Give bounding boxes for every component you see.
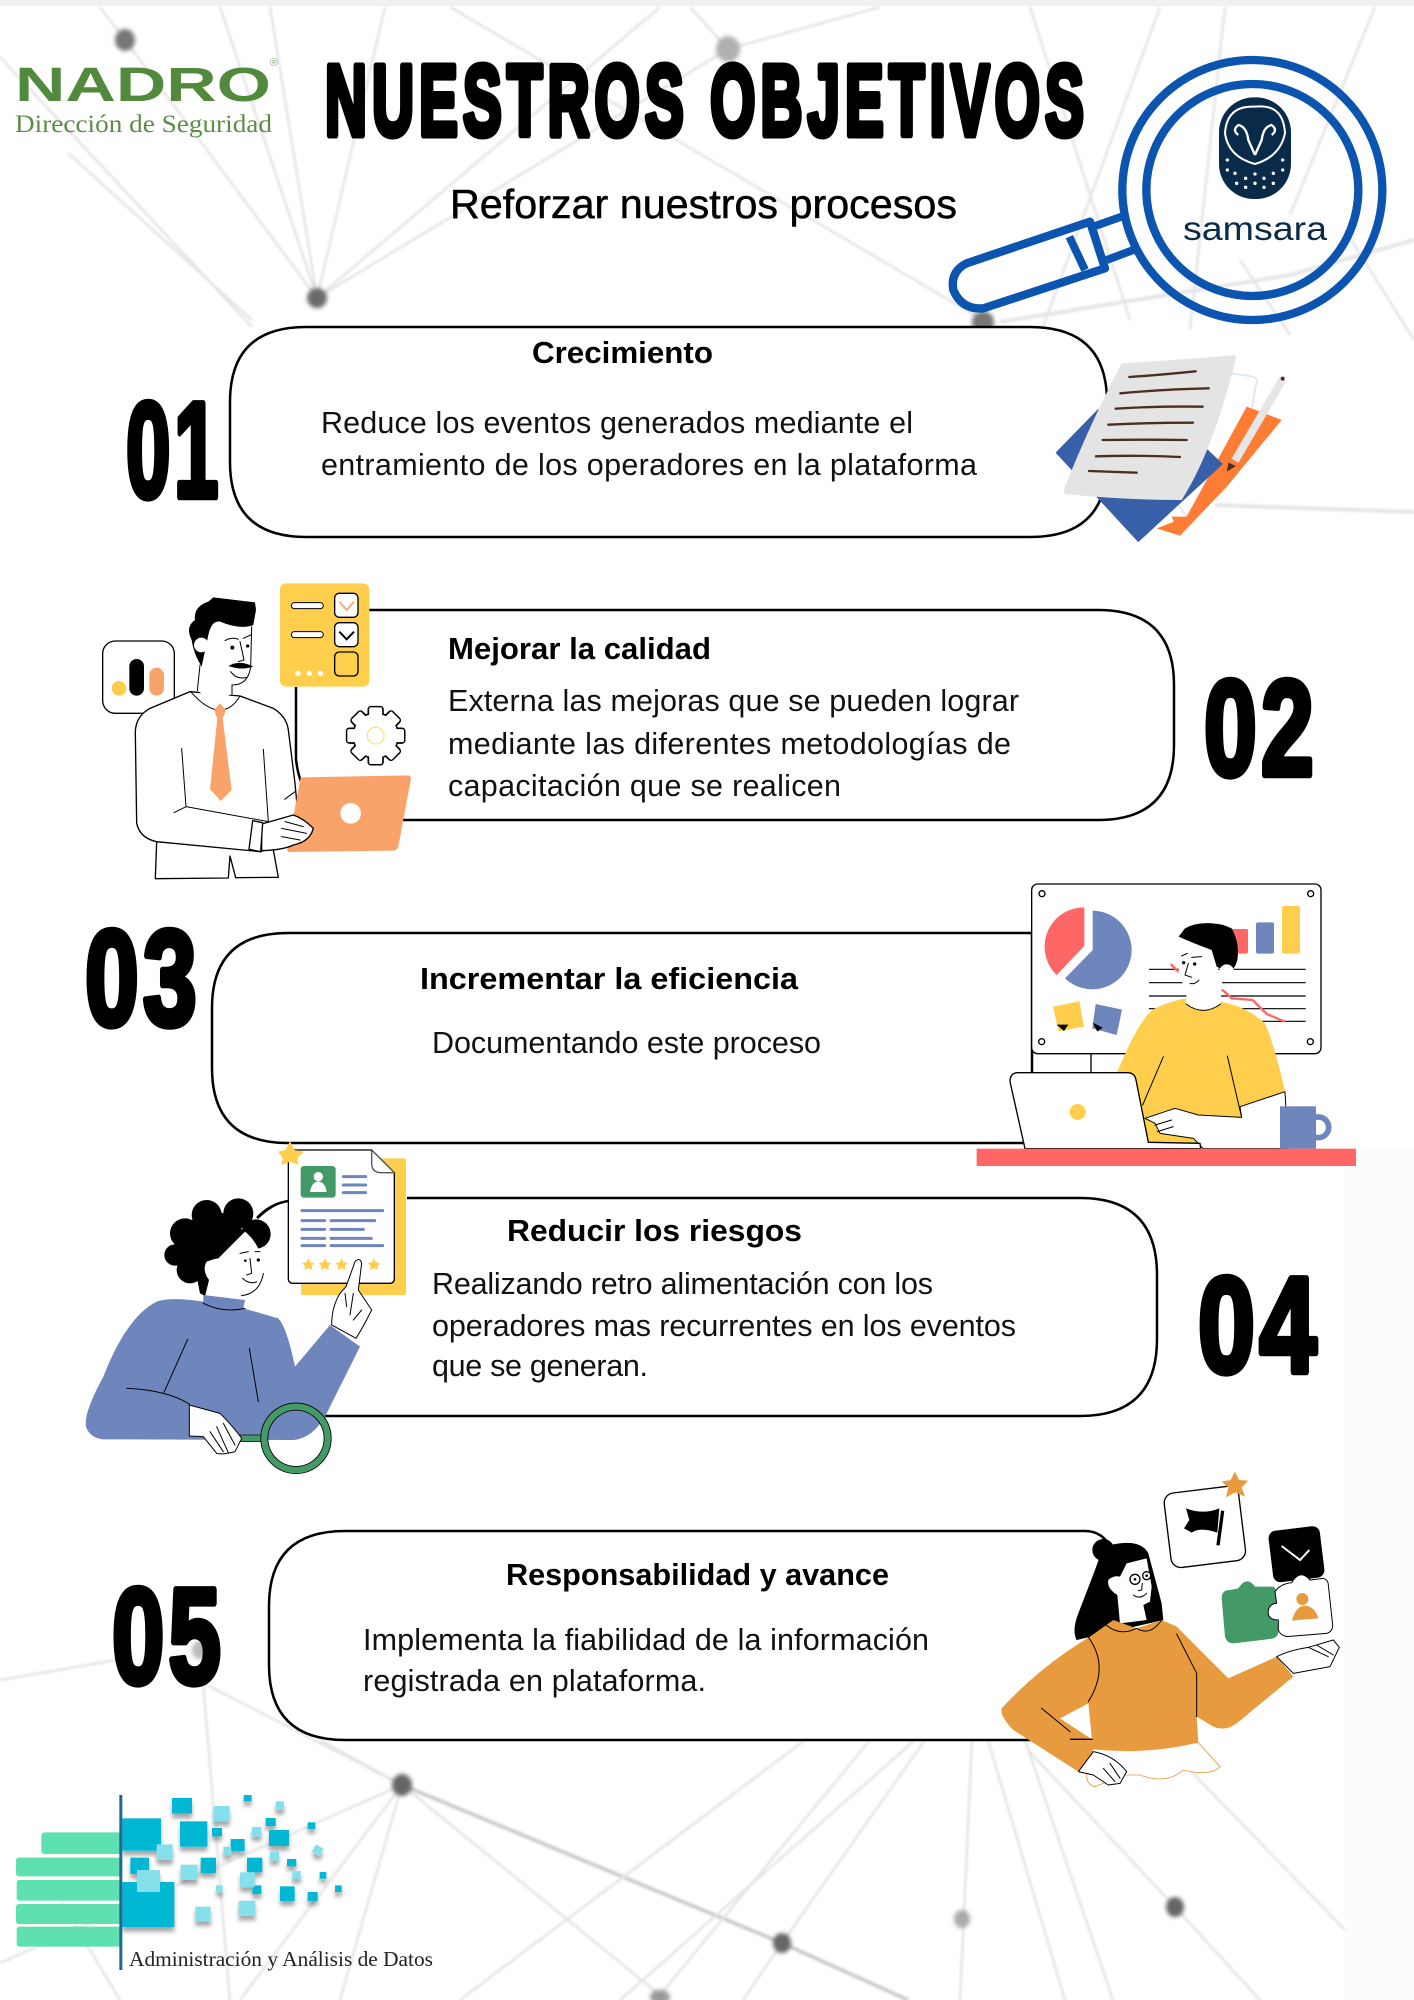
logo caption: Administración y Análisis de Datos bbox=[129, 1947, 433, 1971]
body text: capacitación que se realicen bbox=[448, 769, 841, 803]
panel: objective 4 bbox=[257, 1198, 1157, 1416]
icon: CV document bbox=[278, 1141, 406, 1295]
panel: objective 3 bbox=[212, 933, 1032, 1143]
body text: operadores mas recurrentes en los eventos bbox=[432, 1309, 1016, 1343]
subtitle: Reforzar nuestros procesos bbox=[450, 181, 957, 227]
woman figure bbox=[86, 1198, 372, 1440]
laptop bbox=[287, 775, 411, 852]
logo: Administración y Análisis de Datos bbox=[16, 1795, 342, 1970]
panel: objective 5 bbox=[269, 1531, 1120, 1740]
bar chart bbox=[1230, 906, 1300, 954]
heading: Responsabilidad y avance: Responsabilidad y avance bbox=[506, 1557, 889, 1592]
body text: entramiento de los operadores en la plataforma bbox=[321, 448, 977, 482]
icon: magnifier with samsara logo: samsara bbox=[1183, 210, 1328, 247]
body text bbox=[363, 1623, 929, 1698]
icon: magnifier bbox=[189, 1405, 328, 1470]
heading: Reducir los riesgos: Reducir los riesgos bbox=[507, 1213, 802, 1248]
logo: NADRO Dirección de Seguridad: Dirección de Seguridad bbox=[15, 111, 273, 138]
hand bbox=[249, 815, 313, 852]
body text: Reduce los eventos generados mediante el bbox=[321, 406, 913, 440]
logo: NADRO Dirección de Seguridad: ® bbox=[270, 57, 278, 69]
body text: Implementa la fiabilidad de la información bbox=[363, 1623, 929, 1657]
body text: mediante las diferentes metodologías de bbox=[448, 727, 1011, 761]
woman figure bbox=[1001, 1539, 1339, 1787]
body text: Externa las mejoras que se pueden lograr bbox=[448, 684, 1019, 718]
icon: checklist panel bbox=[280, 583, 369, 687]
illustration: man at desk with dashboard bbox=[977, 884, 1356, 1166]
body text bbox=[432, 1267, 1016, 1383]
icon: check tile bbox=[1268, 1525, 1325, 1583]
logo: NADRO Dirección de Seguridad bbox=[15, 57, 278, 138]
icon: documents and pen bbox=[1057, 355, 1285, 541]
icon: puzzle pieces bbox=[1222, 1575, 1333, 1643]
illustration: man with laptop and checklist bbox=[103, 583, 411, 879]
dashboard board bbox=[1032, 884, 1321, 1073]
number 05: 05 bbox=[112, 1560, 225, 1712]
mug bbox=[1280, 1106, 1329, 1149]
number 02: 02 bbox=[1204, 652, 1318, 804]
pie chart bbox=[1045, 907, 1132, 989]
icon: magnifier with samsara logo bbox=[953, 60, 1382, 320]
panel: objective 1 bbox=[230, 327, 1107, 537]
icon: bar chart tile bbox=[103, 641, 174, 713]
sticky notes bbox=[1053, 1001, 1122, 1035]
logo: NADRO Dirección de Seguridad: NADRO bbox=[15, 59, 271, 112]
icon: gear bbox=[347, 707, 405, 765]
laptop bbox=[1010, 1073, 1201, 1149]
heading: Mejorar la calidad: Mejorar la calidad bbox=[448, 631, 711, 666]
body text: que se generan. bbox=[432, 1349, 648, 1383]
number 01: 01 bbox=[126, 374, 222, 526]
body text bbox=[321, 406, 977, 482]
data squares bbox=[122, 1795, 342, 1927]
desk bbox=[977, 1149, 1356, 1166]
body text bbox=[448, 684, 1019, 803]
body text: registrada en plataforma. bbox=[363, 1664, 706, 1698]
body text: Documentando este proceso bbox=[432, 1026, 821, 1060]
heading: Crecimiento: Crecimiento bbox=[532, 335, 713, 370]
panel: objective 2 bbox=[296, 610, 1174, 820]
illustration: woman with floating icons bbox=[1001, 1472, 1339, 1787]
icon: flag tile with star bbox=[1163, 1472, 1248, 1569]
man figure bbox=[135, 597, 300, 879]
number 04: 04 bbox=[1198, 1249, 1321, 1401]
man figure bbox=[1117, 923, 1288, 1149]
number 03: 03 bbox=[85, 902, 201, 1054]
heading: Incrementar la eficiencia: Incrementar la eficiencia bbox=[420, 961, 799, 996]
illustration: woman with CV and magnifier bbox=[86, 1141, 406, 1470]
body text: Realizando retro alimentación con los bbox=[432, 1267, 933, 1301]
green bars bbox=[16, 1832, 121, 1947]
line chart bbox=[1149, 964, 1306, 1022]
